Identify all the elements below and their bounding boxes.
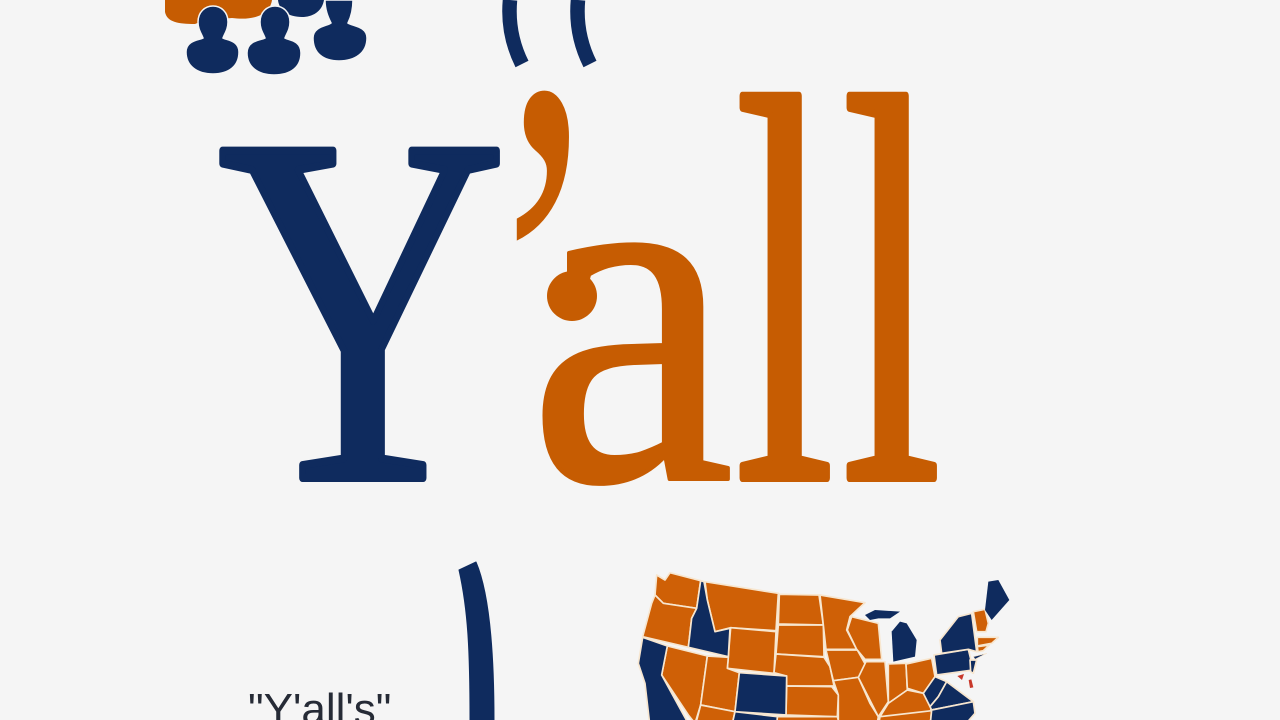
left arc <box>510 0 522 64</box>
second letter l: l <box>842 0 942 598</box>
states using the navy category <box>638 580 1009 720</box>
terminal bulb of the a <box>547 271 597 321</box>
states using the orange category <box>643 573 998 720</box>
icon: group of people <box>165 0 367 75</box>
right arc <box>578 0 590 64</box>
map: United States choropleth <box>638 573 1009 720</box>
title: Y'all wordmark <box>218 0 942 606</box>
small red marks near the mid-Atlantic <box>957 674 973 688</box>
letter a: a <box>528 35 734 588</box>
person 2 <box>247 6 301 75</box>
person 3 <box>313 0 367 61</box>
icon: large bracket arc <box>459 562 494 720</box>
letter l: l <box>735 0 835 598</box>
letter Y: Y <box>218 33 507 586</box>
navy person, cropped at top <box>278 0 324 17</box>
orange people, cropped at top <box>165 0 272 24</box>
person 1 <box>186 6 239 74</box>
icon: closing quotation arcs <box>510 0 590 64</box>
